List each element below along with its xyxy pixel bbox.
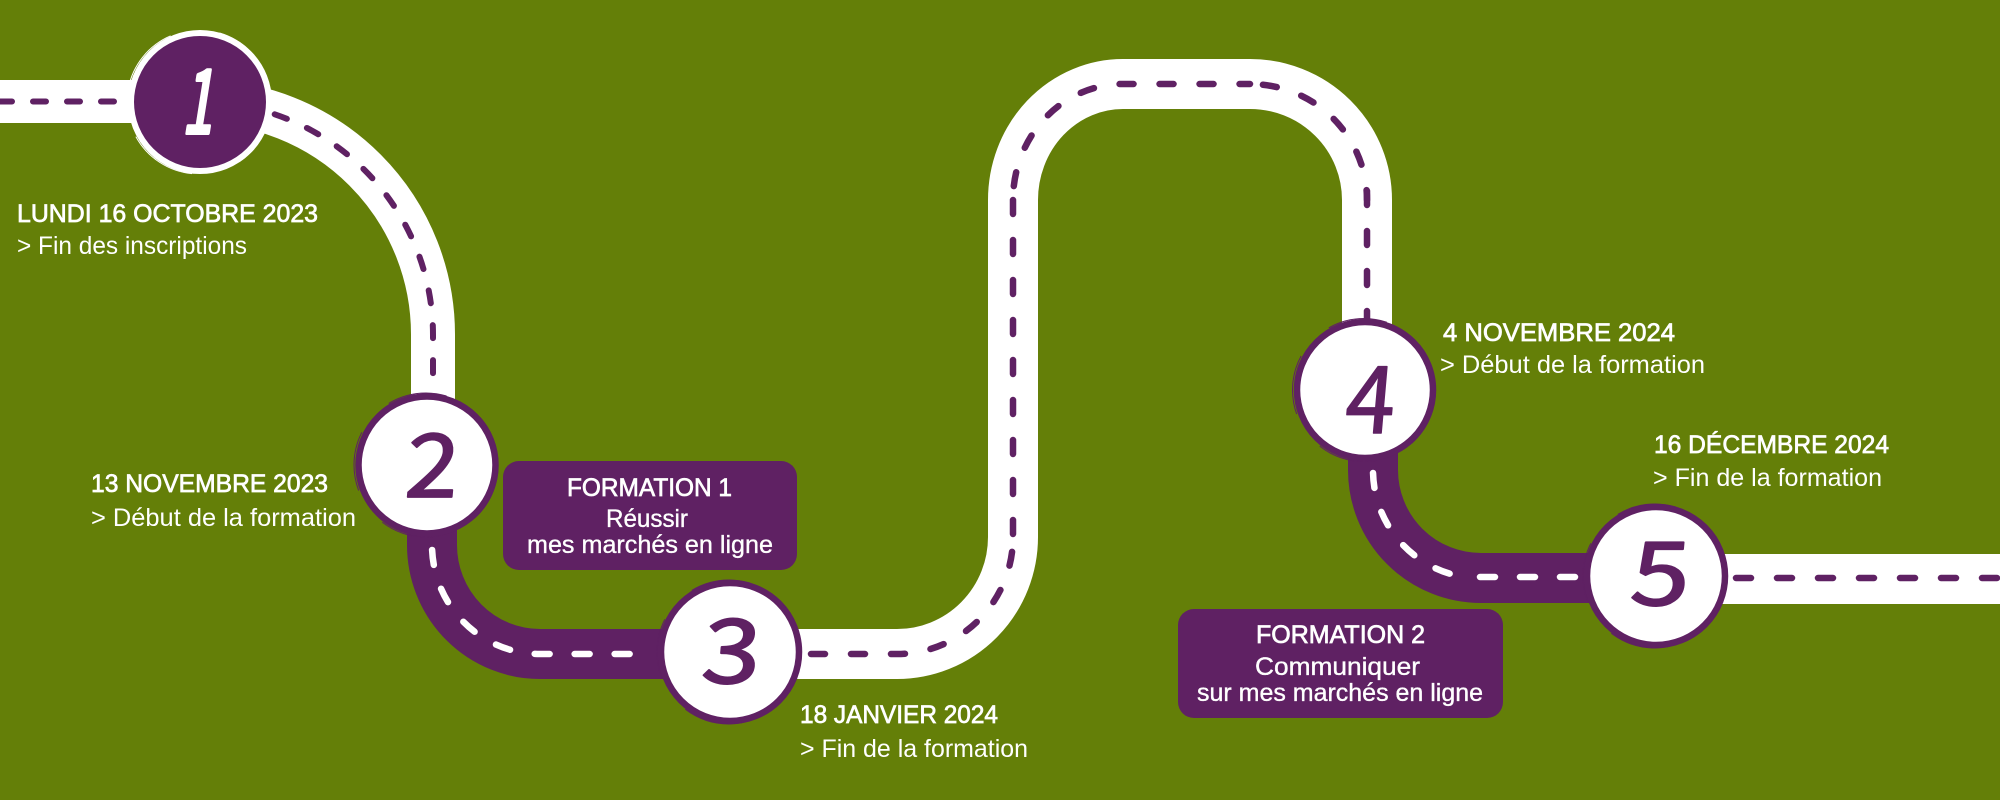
callout: formation 2 bbox=[1178, 609, 1503, 718]
label: step 2 date: > Début de la formation bbox=[91, 504, 356, 532]
label: step 2 date: 13 NOVEMBRE 2023 bbox=[91, 470, 328, 498]
step 5 marker: 5 bbox=[1626, 504, 1696, 631]
step 2 marker: 2 bbox=[401, 396, 465, 523]
callout: formation 1 bbox=[503, 461, 797, 570]
callout: formation 2: FORMATION 2 bbox=[1256, 621, 1425, 649]
road segment: formation 1 (purple) bbox=[432, 500, 680, 654]
label: step 3 date: > Fin de la formation bbox=[800, 735, 1028, 763]
callout: formation 1: Réussir bbox=[606, 505, 688, 533]
label: step 5 date: > Fin de la formation bbox=[1653, 464, 1882, 492]
road segment: step 5 to end (white) bbox=[1690, 578, 2000, 579]
step 4 marker bbox=[1292, 318, 1436, 462]
callout: formation 2: Communiquer bbox=[1255, 653, 1420, 681]
label: step 5 date bbox=[1653, 430, 1889, 492]
label: step 3 date: 18 JANVIER 2024 bbox=[800, 701, 998, 729]
label: step 5 date: 16 DÉCEMBRE 2024 bbox=[1654, 430, 1889, 459]
step 2 marker bbox=[354, 393, 498, 537]
road segment: step 3 to step 4 (white) bbox=[760, 84, 1367, 654]
callout: formation 2: sur mes marchés en ligne bbox=[1197, 679, 1483, 707]
label: step 1 date: > Fin des inscriptions bbox=[17, 232, 247, 260]
label: step 4 date: 4 NOVEMBRE 2024 bbox=[1443, 319, 1675, 347]
label: step 2 date bbox=[91, 470, 356, 532]
callout: formation 1: mes marchés en ligne bbox=[527, 531, 773, 559]
step 5 marker bbox=[1583, 504, 1727, 648]
step 1 marker bbox=[127, 30, 271, 174]
label: step 1 date: LUNDI 16 OCTOBRE 2023 bbox=[17, 200, 318, 228]
label: step 3 date bbox=[800, 701, 1028, 763]
label: step 4 date: > Début de la formation bbox=[1440, 351, 1705, 379]
step 4 marker: 4 bbox=[1341, 327, 1402, 461]
label: step 1 date bbox=[17, 200, 318, 260]
step 1 marker: 1 bbox=[178, 32, 228, 159]
step 3 marker bbox=[657, 580, 801, 724]
road segment: formation 2 (purple) bbox=[1373, 430, 1610, 578]
step 3 marker: 3 bbox=[698, 581, 767, 709]
road segment: start to step 2 (white) bbox=[0, 102, 433, 400]
label: step 4 date bbox=[1440, 319, 1705, 379]
callout: formation 1: FORMATION 1 bbox=[567, 474, 732, 502]
